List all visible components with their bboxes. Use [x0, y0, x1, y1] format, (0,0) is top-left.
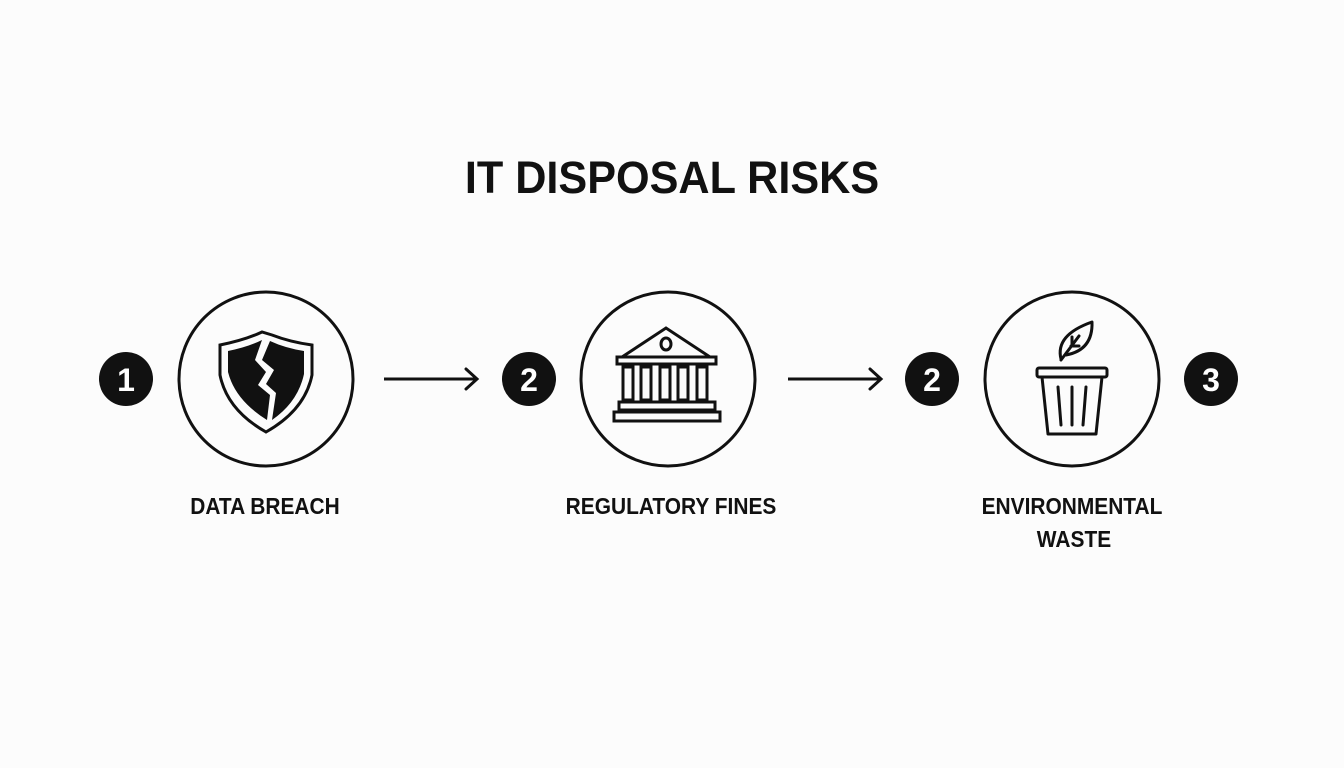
title: IT DISPOSAL RISKS	[465, 153, 879, 203]
label: environmental waste: ENVIRONMENTAL	[982, 493, 1162, 519]
badge 3: 3	[1202, 362, 1220, 398]
label: data breach: DATA BREACH	[190, 493, 340, 519]
label: environmental waste: WASTE	[1037, 526, 1111, 552]
badge 2b: 2	[923, 362, 941, 398]
icon: courthouse	[614, 328, 720, 421]
icon: broken shield	[220, 332, 312, 432]
label: environmental waste	[982, 493, 1162, 552]
panel: regulatory fines	[581, 292, 755, 466]
badge 3	[1184, 352, 1238, 406]
panel: environmental waste	[985, 292, 1159, 466]
badge 1	[99, 352, 153, 406]
panel: data breach	[179, 292, 353, 466]
badge 2	[502, 352, 556, 406]
arrow 1	[384, 369, 477, 389]
icon: bin with leaf	[1037, 322, 1107, 434]
badge 2b	[905, 352, 959, 406]
arrow 2	[788, 369, 881, 389]
badge 2: 2	[520, 362, 538, 398]
badge 1: 1	[117, 362, 135, 398]
label: regulatory fines: REGULATORY FINES	[566, 493, 776, 519]
